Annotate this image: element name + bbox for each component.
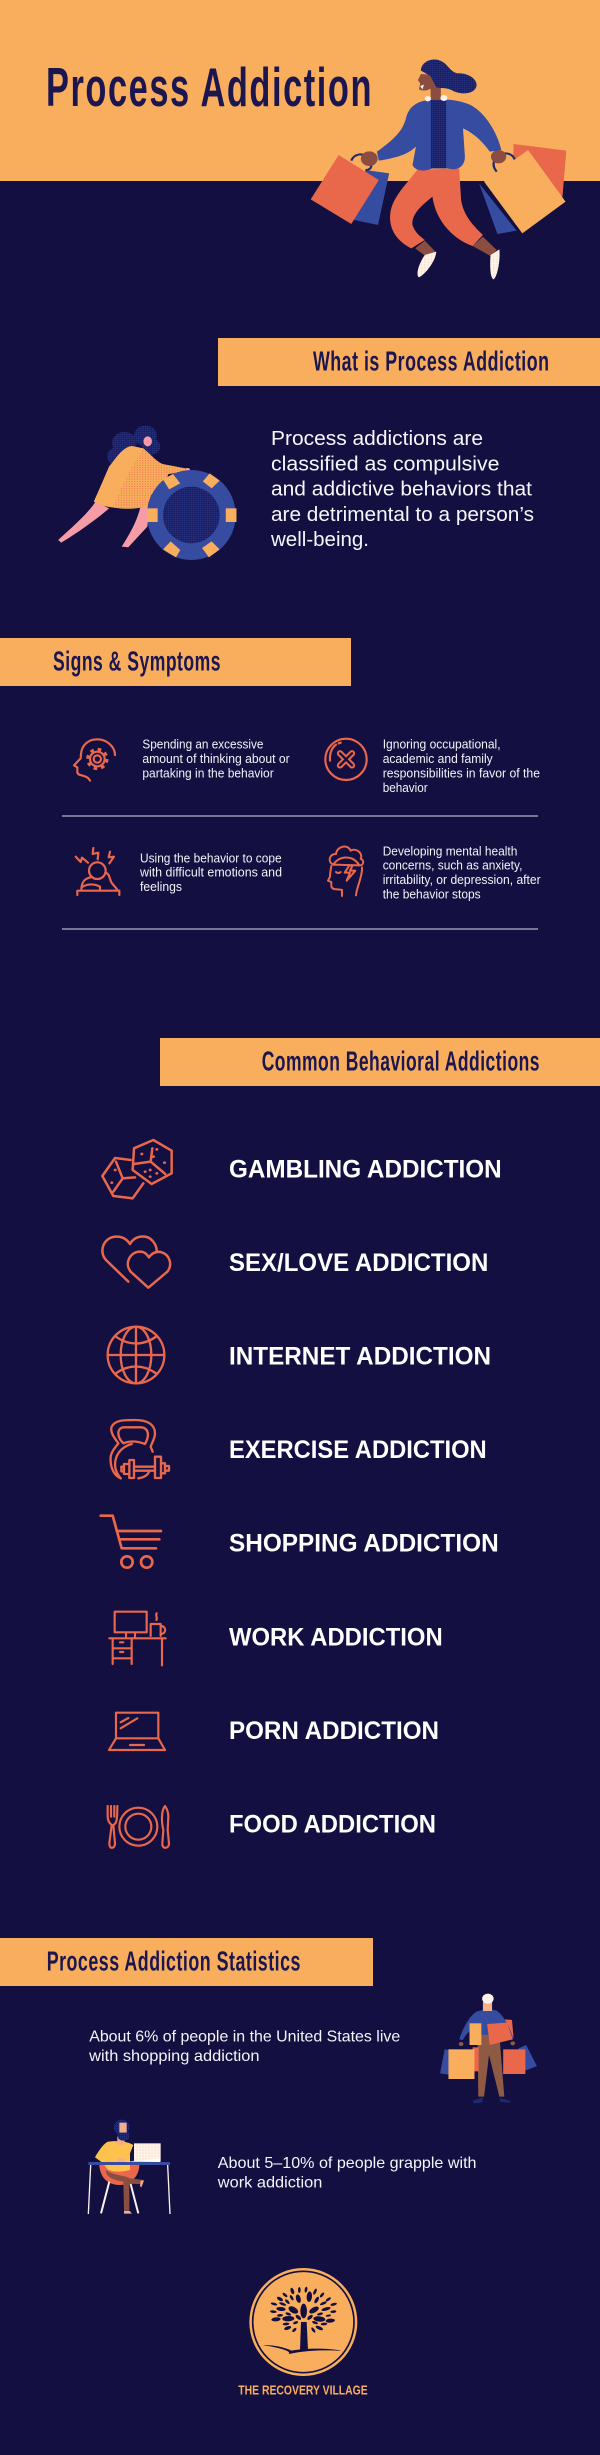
- porn label: PORN ADDICTION: [229, 1717, 439, 1745]
- heading banner: [218, 338, 600, 386]
- logo wordmark: THE RECOVERY VILLAGE: [238, 2383, 368, 2398]
- definition paragraph: and addictive behaviors that: [271, 479, 532, 501]
- symptom text: excessive thinking: Spending an excessive: [142, 738, 263, 752]
- title: Process Addiction: [46, 56, 373, 118]
- heading banner: [0, 1938, 373, 1986]
- symptom text: ignoring responsibilities: behavior: [383, 781, 428, 795]
- icon: shopping cart: [101, 1516, 161, 1568]
- figure head and hair: [418, 60, 477, 101]
- icon: circle with cross: [325, 739, 367, 780]
- symptom text: coping: feelings: [140, 880, 182, 894]
- symptom text: ignoring responsibilities: [383, 738, 540, 795]
- section: process addiction statistics: [0, 1938, 537, 2214]
- symptom text: coping: [139, 851, 282, 894]
- gambling label: GAMBLING ADDICTION: [229, 1155, 502, 1183]
- statistic: shopping addiction: [88, 2029, 400, 2065]
- food label: FOOD ADDICTION: [229, 1811, 436, 1839]
- statistic: work addiction: About 5–10% of people grapple with: [218, 2155, 477, 2172]
- definition paragraph: Process addictions are: [271, 428, 483, 450]
- statistic: work addiction: work addiction: [217, 2174, 322, 2191]
- definition paragraph: well-being.: [270, 529, 369, 551]
- symptom text: excessive thinking: amount of thinking about or: [142, 752, 290, 766]
- symptom text: ignoring responsibilities: responsibilities in favor of the: [383, 767, 540, 781]
- illustration: woman carrying shopping bags: [311, 60, 566, 279]
- heading banner: Process Addiction Statistics: [47, 1946, 301, 1976]
- section: what is process addiction: [58, 338, 600, 560]
- symptom text: excessive thinking: partaking in the behavior: [142, 767, 274, 781]
- symptom text: coping: with difficult emotions and: [139, 866, 282, 880]
- definition paragraph: are detrimental to a person’s: [271, 504, 534, 526]
- symptom text: mental health: concerns, such as anxiety,: [383, 859, 522, 873]
- internet label: INTERNET ADDICTION: [229, 1343, 491, 1371]
- symptom text: mental health: the behavior stops: [383, 887, 481, 901]
- icon: dice: [102, 1140, 172, 1198]
- icon: plate with cutlery: [108, 1806, 169, 1848]
- poker chip: [147, 470, 236, 560]
- figure torso and arms: [361, 100, 506, 171]
- icon: two hearts: [102, 1237, 170, 1288]
- definition paragraph: classified as compulsive: [271, 453, 500, 475]
- logo badge with tree: [249, 2268, 357, 2376]
- left shopping bags: [311, 154, 389, 225]
- statistic: shopping addiction: with shopping addiction: [88, 2048, 260, 2065]
- exercise label: EXERCISE ADDICTION: [229, 1436, 487, 1464]
- icon: kettlebell and dumbbell: [111, 1420, 169, 1478]
- heading banner: Signs & Symptoms: [53, 646, 221, 676]
- heading banner: [0, 638, 351, 686]
- section: signs and symptoms: [0, 638, 541, 929]
- symptom text: ignoring responsibilities: Ignoring occupational,: [383, 738, 501, 752]
- right shopping bags: [479, 144, 566, 234]
- icon: globe: [108, 1327, 164, 1383]
- symptom text: ignoring responsibilities: academic and family: [383, 752, 493, 766]
- statistic: work addiction: [217, 2155, 476, 2191]
- statistic: shopping addiction: About 6% of people in the United States live: [89, 2029, 400, 2046]
- symptom text: mental health: irritability, or depression, after: [383, 873, 541, 887]
- icon: stressed person: [76, 848, 119, 895]
- heading banner: [160, 1038, 600, 1086]
- logo: the recovery village: [238, 2268, 368, 2398]
- section: common behavioral addictions: [101, 1038, 600, 1848]
- symptom text: coping: Using the behavior to cope: [140, 851, 282, 865]
- work label: WORK ADDICTION: [229, 1623, 443, 1651]
- symptom text: mental health: Developing mental health: [383, 844, 517, 858]
- shopping label: SHOPPING ADDICTION: [229, 1530, 499, 1558]
- icon: head with gear: [74, 739, 115, 781]
- icon: work desk: [109, 1612, 166, 1665]
- illustration: man holding shopping bags: [440, 1994, 537, 2103]
- icon: laptop: [109, 1713, 165, 1750]
- symptom text: excessive thinking: [142, 738, 290, 781]
- sex and love label: SEX/LOVE ADDICTION: [229, 1249, 488, 1277]
- definition paragraph: [270, 428, 534, 551]
- icon: head with storm cloud: [328, 847, 363, 896]
- illustration: man working at laptop: [88, 2120, 170, 2214]
- header band: [0, 0, 600, 181]
- illustration: woman pushing poker chip: [58, 426, 236, 560]
- symptom text: mental health: [383, 844, 541, 901]
- figure legs and shoes: [390, 168, 500, 279]
